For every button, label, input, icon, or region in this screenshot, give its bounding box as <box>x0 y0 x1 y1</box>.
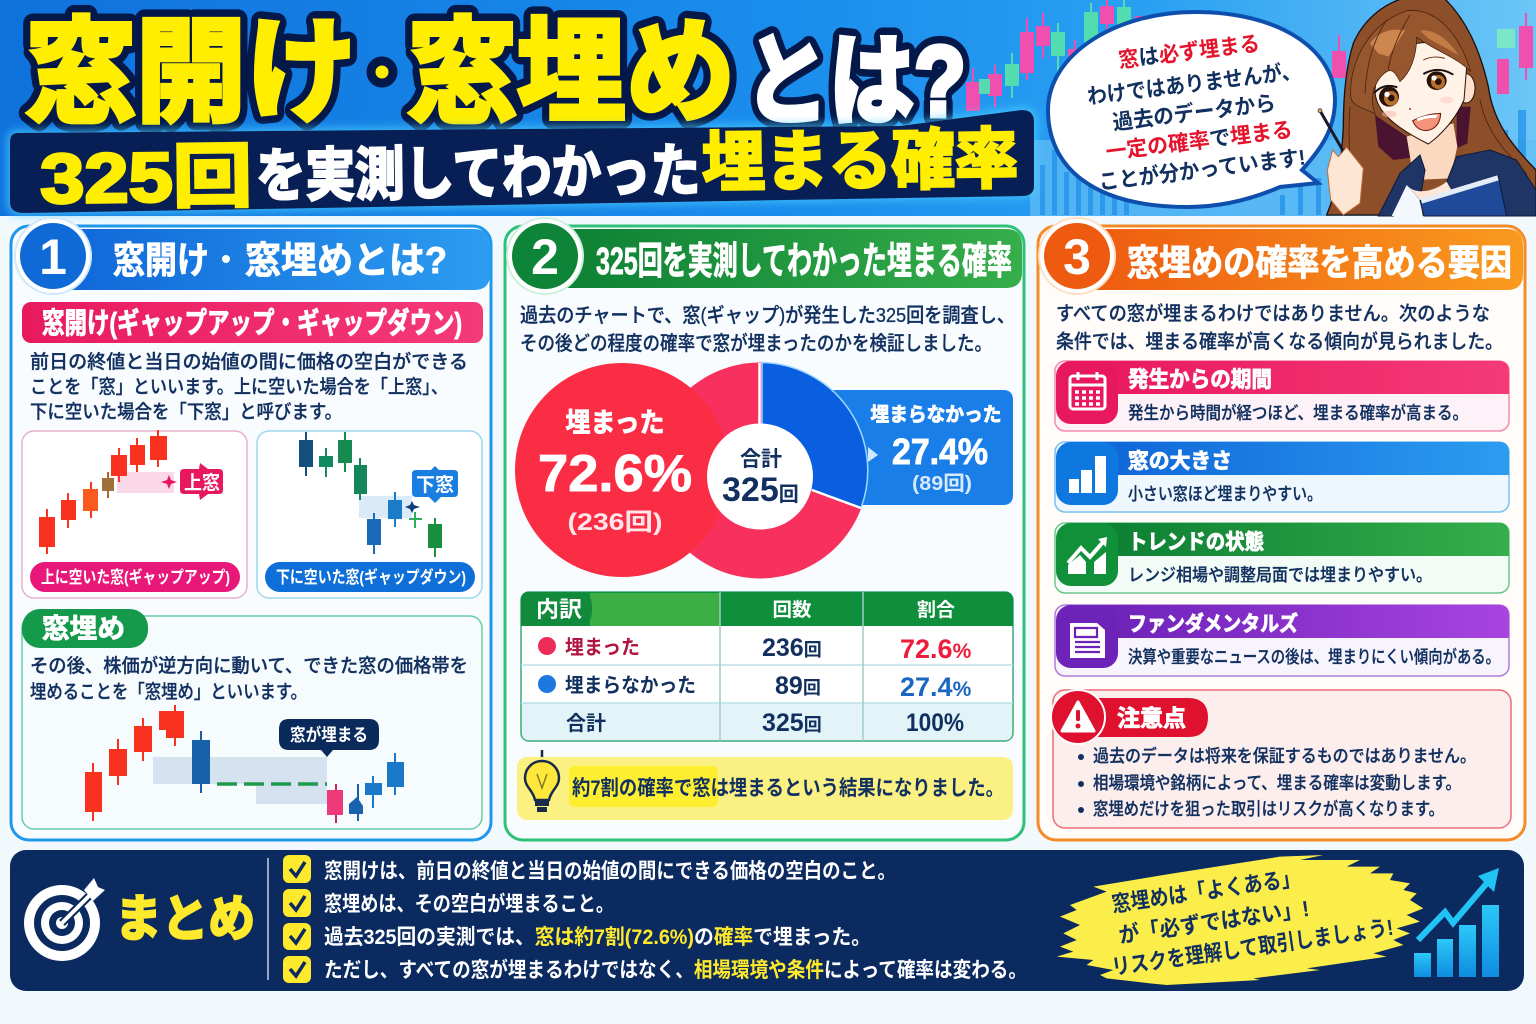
table row: total <box>566 709 964 737</box>
subtitle band <box>8 108 1036 218</box>
factor: time since <box>1055 361 1509 431</box>
caution box <box>1051 690 1511 828</box>
panel 3 intro: すべての窓が埋まるわけではありません。次のような <box>1056 303 1490 325</box>
icon: bar chart <box>1056 442 1118 505</box>
unfilled share callout: 27.4% <box>892 431 988 472</box>
panel 1 heading: 窓開け <box>113 240 209 281</box>
title: 窓埋め <box>408 10 735 137</box>
table row: filled: 埋まった <box>565 636 640 659</box>
gap fill card <box>22 609 482 829</box>
table row: filled: 236回 <box>762 634 822 662</box>
factor: fundamentals: ファンダメンタルズ <box>1128 612 1298 636</box>
table row: total: 合計 <box>566 712 606 735</box>
illustration: presenter woman <box>1318 0 1536 216</box>
yellow brush note: が「必ずではない」! <box>1117 896 1311 948</box>
panel 1 heading <box>15 218 490 294</box>
title: 窓開け <box>26 10 356 137</box>
gap fill subheading: 窓埋め <box>42 614 125 644</box>
title: 窓埋め <box>408 10 735 137</box>
table row: total: 325回 <box>762 709 822 737</box>
panel 2 intro: その後どの程度の確率で窓が埋まったのかを検証しました。 <box>520 332 992 355</box>
table row: not filled: 27.4% <box>900 672 972 702</box>
icon: target with arrow <box>24 878 105 961</box>
panel 3 heading: 3 <box>1063 229 1091 285</box>
speech bubble: わけではありませんが、 <box>1086 58 1302 109</box>
subtitle band: 325回 <box>40 137 253 218</box>
speech bubble <box>1048 12 1335 207</box>
gap down label <box>412 466 458 503</box>
breakdown table <box>521 592 1013 741</box>
subtitle band: 埋まる確率 <box>702 122 1018 200</box>
breakdown table: 割合 <box>917 599 955 621</box>
unfilled share callout: 埋まらなかった <box>870 404 1002 426</box>
title <box>26 10 966 138</box>
donut centre total: 合計 <box>740 448 782 471</box>
chart card: gap down <box>257 431 482 598</box>
table row: not filled: 89回 <box>775 672 821 700</box>
summary checklist: 過去325回の実測では、窓は約7割(72.6%)の確率で埋まった。 <box>324 926 871 949</box>
panel 3 intro: 条件では、埋まる確率が高くなる傾向が見られました。 <box>1056 331 1503 353</box>
table row: not filled: 埋まらなかった <box>565 674 696 697</box>
table row: total: 100% <box>906 709 964 737</box>
gap fill chart <box>86 705 403 823</box>
gap up label <box>180 463 223 500</box>
title: とは? <box>744 26 966 138</box>
caution list <box>1078 746 1476 819</box>
title: とは? <box>744 26 966 138</box>
caution list: 窓埋めだけを狙った取引はリスクが高くなります。 <box>1093 799 1444 819</box>
panel 2 intro <box>520 304 1015 355</box>
icon: warning triangle <box>1051 690 1105 744</box>
icon: rising bar chart <box>1414 868 1499 977</box>
panel 1 heading: 窓埋めとは? <box>245 240 447 281</box>
gap down label: 下窓 <box>416 474 454 496</box>
speech bubble: 過去のデータから <box>1111 90 1277 135</box>
gap up pill <box>30 562 240 592</box>
panel 2 heading: 2 <box>531 229 559 285</box>
unfilled share callout <box>830 390 1013 505</box>
factor: time since: 発生からの期間 <box>1128 367 1272 392</box>
pink candles <box>967 0 1532 110</box>
yellow brush note: 窓埋めは「よくある」 <box>1110 865 1302 917</box>
gap opening explanation <box>30 351 468 423</box>
speech bubble: 窓は必ず埋まる <box>1117 31 1261 73</box>
conclusion callout: 約7割の確率で窓は埋まるという結果になりました。 <box>572 777 1004 800</box>
gap filled label: 窓が埋まる <box>290 725 368 745</box>
panel 2: measured probability <box>505 218 1024 840</box>
donut centre total: 325回 <box>722 471 799 509</box>
summary checklist: 窓埋めは、その空白が埋まること。 <box>324 892 614 916</box>
gap opening explanation: ことを「窓」といいます。上に空いた場合を「上窓」、 <box>30 376 448 398</box>
speech bubble: ことが分かっています! <box>1097 144 1307 195</box>
panel 2 intro: 過去のチャートで、窓(ギャップ)が発生した325回を調査し、 <box>520 304 1015 327</box>
caution list: 過去のデータは将来を保証するものではありません。 <box>1093 746 1476 766</box>
panel 1: what is a gap <box>11 218 491 840</box>
factor: trend state: レンジ相場や調整局面では埋まりやすい。 <box>1128 565 1432 585</box>
factor: trend state <box>1055 523 1509 593</box>
donut centre total <box>722 448 799 509</box>
gap fill subheading <box>22 609 148 648</box>
gap up pill: 上に空いた窓(ギャップアップ) <box>41 568 230 587</box>
gap opening explanation: 前日の終値と当日の始値の間に価格の空白ができる <box>30 351 468 373</box>
summary checklist: 窓開けは、前日の終値と当日の始値の間にできる価格の空白のこと。 <box>324 860 896 883</box>
gap opening subheading: 窓開け(ギャップアップ・ギャップダウン) <box>42 306 462 340</box>
yellow brush note <box>1057 855 1423 985</box>
factor: time since: 発生から時間が経つほど、埋まる確率が高まる。 <box>1128 403 1468 423</box>
caution list: 相場環境や銘柄によって、埋まる確率は変動します。 <box>1093 773 1461 793</box>
summary band <box>10 850 1524 991</box>
yellow brush note: リスクを理解して取引しましょう! <box>1110 915 1395 980</box>
panel 3: factors <box>1038 218 1525 840</box>
filled share circle: (236回) <box>568 509 662 536</box>
green candles <box>980 0 1514 98</box>
caution label: 注意点 <box>1117 705 1186 731</box>
conclusion callout <box>517 750 1013 820</box>
panel 3 heading <box>1039 218 1523 294</box>
factor: gap size: 窓の大きさ <box>1128 450 1232 473</box>
table row: filled: 72.6% <box>900 634 972 664</box>
factor: gap size <box>1055 442 1509 512</box>
gap opening subheading <box>22 302 483 343</box>
chart card: gap up <box>22 430 247 598</box>
panel 1 heading: 1 <box>39 229 67 285</box>
summary checklist <box>268 855 1027 983</box>
gap fill explanation <box>30 655 468 703</box>
gap filled label <box>279 719 379 757</box>
gap fill explanation: 埋めることを「窓埋め」といいます。 <box>30 681 307 703</box>
factor: trend state: トレンドの状態 <box>1128 531 1264 554</box>
unfilled share callout: (89回) <box>912 473 972 495</box>
icon: news document <box>1056 605 1118 668</box>
factor: gap size: 小さい窓ほど埋まりやすい。 <box>1128 484 1322 504</box>
icon: calendar <box>1056 361 1118 424</box>
panel 3 intro <box>1056 303 1503 353</box>
donut chart <box>515 362 868 578</box>
panel 2 heading: 325回を実測してわかった埋まる確率 <box>596 241 1012 283</box>
subtitle band: を実測してわかった <box>256 139 701 209</box>
filled share circle <box>515 363 813 577</box>
gap down pill <box>265 562 475 592</box>
icon: light bulb <box>525 750 559 812</box>
table row: filled <box>538 634 972 664</box>
summary checklist: ただし、すべての窓が埋まるわけではなく、相場環境や条件によって確率は変わる。 <box>324 958 1027 982</box>
caution label <box>1078 698 1208 737</box>
gap down pill: 下に空いた窓(ギャップダウン) <box>276 567 466 587</box>
panel 2 heading <box>507 218 1022 294</box>
title: 窓開け <box>26 10 356 137</box>
speech bubble: 一定の確率で埋まる <box>1104 118 1294 164</box>
filled share circle: 72.6% <box>538 445 692 503</box>
header banner background with candlesticks <box>0 0 1536 216</box>
gap fill explanation: その後、株価が逆方向に動いて、できた窓の価格帯を <box>30 655 468 677</box>
factor: fundamentals <box>1055 605 1509 676</box>
gap opening explanation: 下に空いた場合を「下窓」と呼びます。 <box>30 401 342 423</box>
breakdown table: 回数 <box>772 599 812 621</box>
gap up label: 上窓 <box>184 472 220 494</box>
icon: trend chart <box>1056 523 1118 586</box>
breakdown table: 内訳 <box>536 597 582 622</box>
summary heading: まとめ <box>115 891 255 947</box>
table row: not filled <box>538 672 972 702</box>
filled share circle: 埋まった <box>566 408 664 438</box>
